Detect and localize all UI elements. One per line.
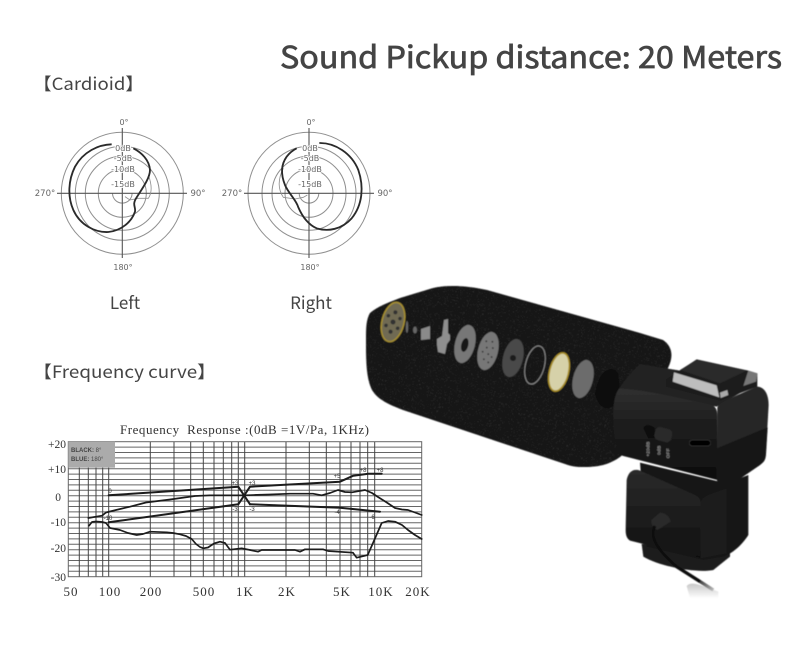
point labels: [104, 468, 384, 522]
x axis labels: [64, 584, 431, 599]
point labels: -3: [249, 507, 255, 513]
point labels: +3: [249, 481, 256, 487]
x axis labels: 100: [99, 584, 121, 599]
switch labels: OFF: [665, 448, 671, 458]
legend box: BLACK: 8°: [71, 448, 102, 454]
x axis labels: 20K: [405, 584, 431, 599]
label: left: Left: [110, 289, 141, 314]
exploded capsule parts: [377, 300, 597, 400]
chart title: Frequency Response :(0dB =1V/Pa, 1KHz): [120, 422, 369, 437]
point labels: +5: [334, 474, 341, 480]
polar chart: left: -10dB: [111, 165, 135, 174]
foam windscreen: [366, 286, 671, 467]
curves: [88, 474, 422, 558]
y axis labels: +10: [48, 464, 66, 476]
heading: frequency curve: 【Frequency curve】: [33, 358, 216, 383]
x axis labels: 500: [193, 584, 215, 599]
point labels: 0: [108, 489, 112, 495]
heading: cardioid: 【Cardioid】: [33, 70, 144, 95]
polar chart: left: 180°: [113, 263, 133, 272]
lower block: [640, 463, 748, 560]
legend box: [68, 442, 115, 468]
grid: [68, 442, 422, 577]
switch labels: [646, 441, 671, 458]
y axis labels: -30: [51, 572, 66, 584]
y axis labels: +20: [48, 439, 66, 451]
switch labels: +20dB: [646, 441, 652, 457]
polar chart: right: 90°: [377, 189, 393, 199]
polar chart: right: [222, 118, 393, 272]
point labels: +8: [360, 468, 367, 474]
polar chart: right: 270°: [222, 189, 242, 199]
polar chart: right: 0dB: [302, 144, 318, 153]
microphone product: [366, 286, 769, 598]
x axis labels: 10K: [368, 584, 394, 599]
y axis labels: [48, 439, 66, 584]
polar chart: left: 0°: [119, 118, 129, 127]
cable plug end fading out: [687, 584, 718, 598]
legend box: BLUE: 180°: [71, 457, 104, 463]
point labels: +3: [232, 481, 239, 487]
switch labels: 0dB: [656, 445, 662, 455]
y axis labels: -10: [51, 517, 66, 529]
polar chart: left: 270°: [35, 189, 55, 199]
x axis labels: 1K: [236, 584, 254, 599]
x axis labels: 5K: [333, 584, 351, 599]
polar chart: left: 0dB: [115, 144, 131, 153]
point labels: -10: [104, 516, 113, 522]
x axis labels: 2K: [278, 584, 296, 599]
point labels: -3: [232, 507, 238, 513]
frequency response chart: [48, 422, 431, 599]
polar chart: right: -10dB: [298, 165, 322, 174]
y axis labels: -20: [51, 543, 66, 555]
title: Sound Pickup distance: 20 Meters: [280, 33, 782, 77]
usb port: [689, 440, 711, 446]
polar chart: left: [35, 118, 206, 272]
cable plug: [651, 513, 671, 530]
x axis labels: 50: [64, 584, 78, 599]
housing: [595, 359, 769, 598]
upper body: [619, 364, 757, 407]
point labels: +8: [377, 468, 384, 474]
polar chart: right: -5dB: [301, 154, 319, 163]
polar chart: left: 90°: [190, 189, 206, 199]
point labels: -6: [369, 515, 375, 521]
label: right: Right: [290, 289, 332, 314]
base ring: [642, 544, 730, 571]
polar chart: right: 0°: [306, 118, 316, 127]
polar chart: right: 180°: [300, 263, 320, 272]
polar chart: left: -15dB: [111, 180, 135, 189]
point labels: -4: [334, 510, 340, 516]
x axis labels: 200: [140, 584, 162, 599]
polar chart: left: -5dB: [114, 154, 132, 163]
switch: [643, 425, 655, 438]
polar chart: right: -15dB: [298, 180, 322, 189]
hot shoe: [666, 359, 757, 401]
cable: [653, 523, 713, 590]
y axis labels: 0: [55, 492, 61, 504]
collar: [595, 369, 622, 409]
